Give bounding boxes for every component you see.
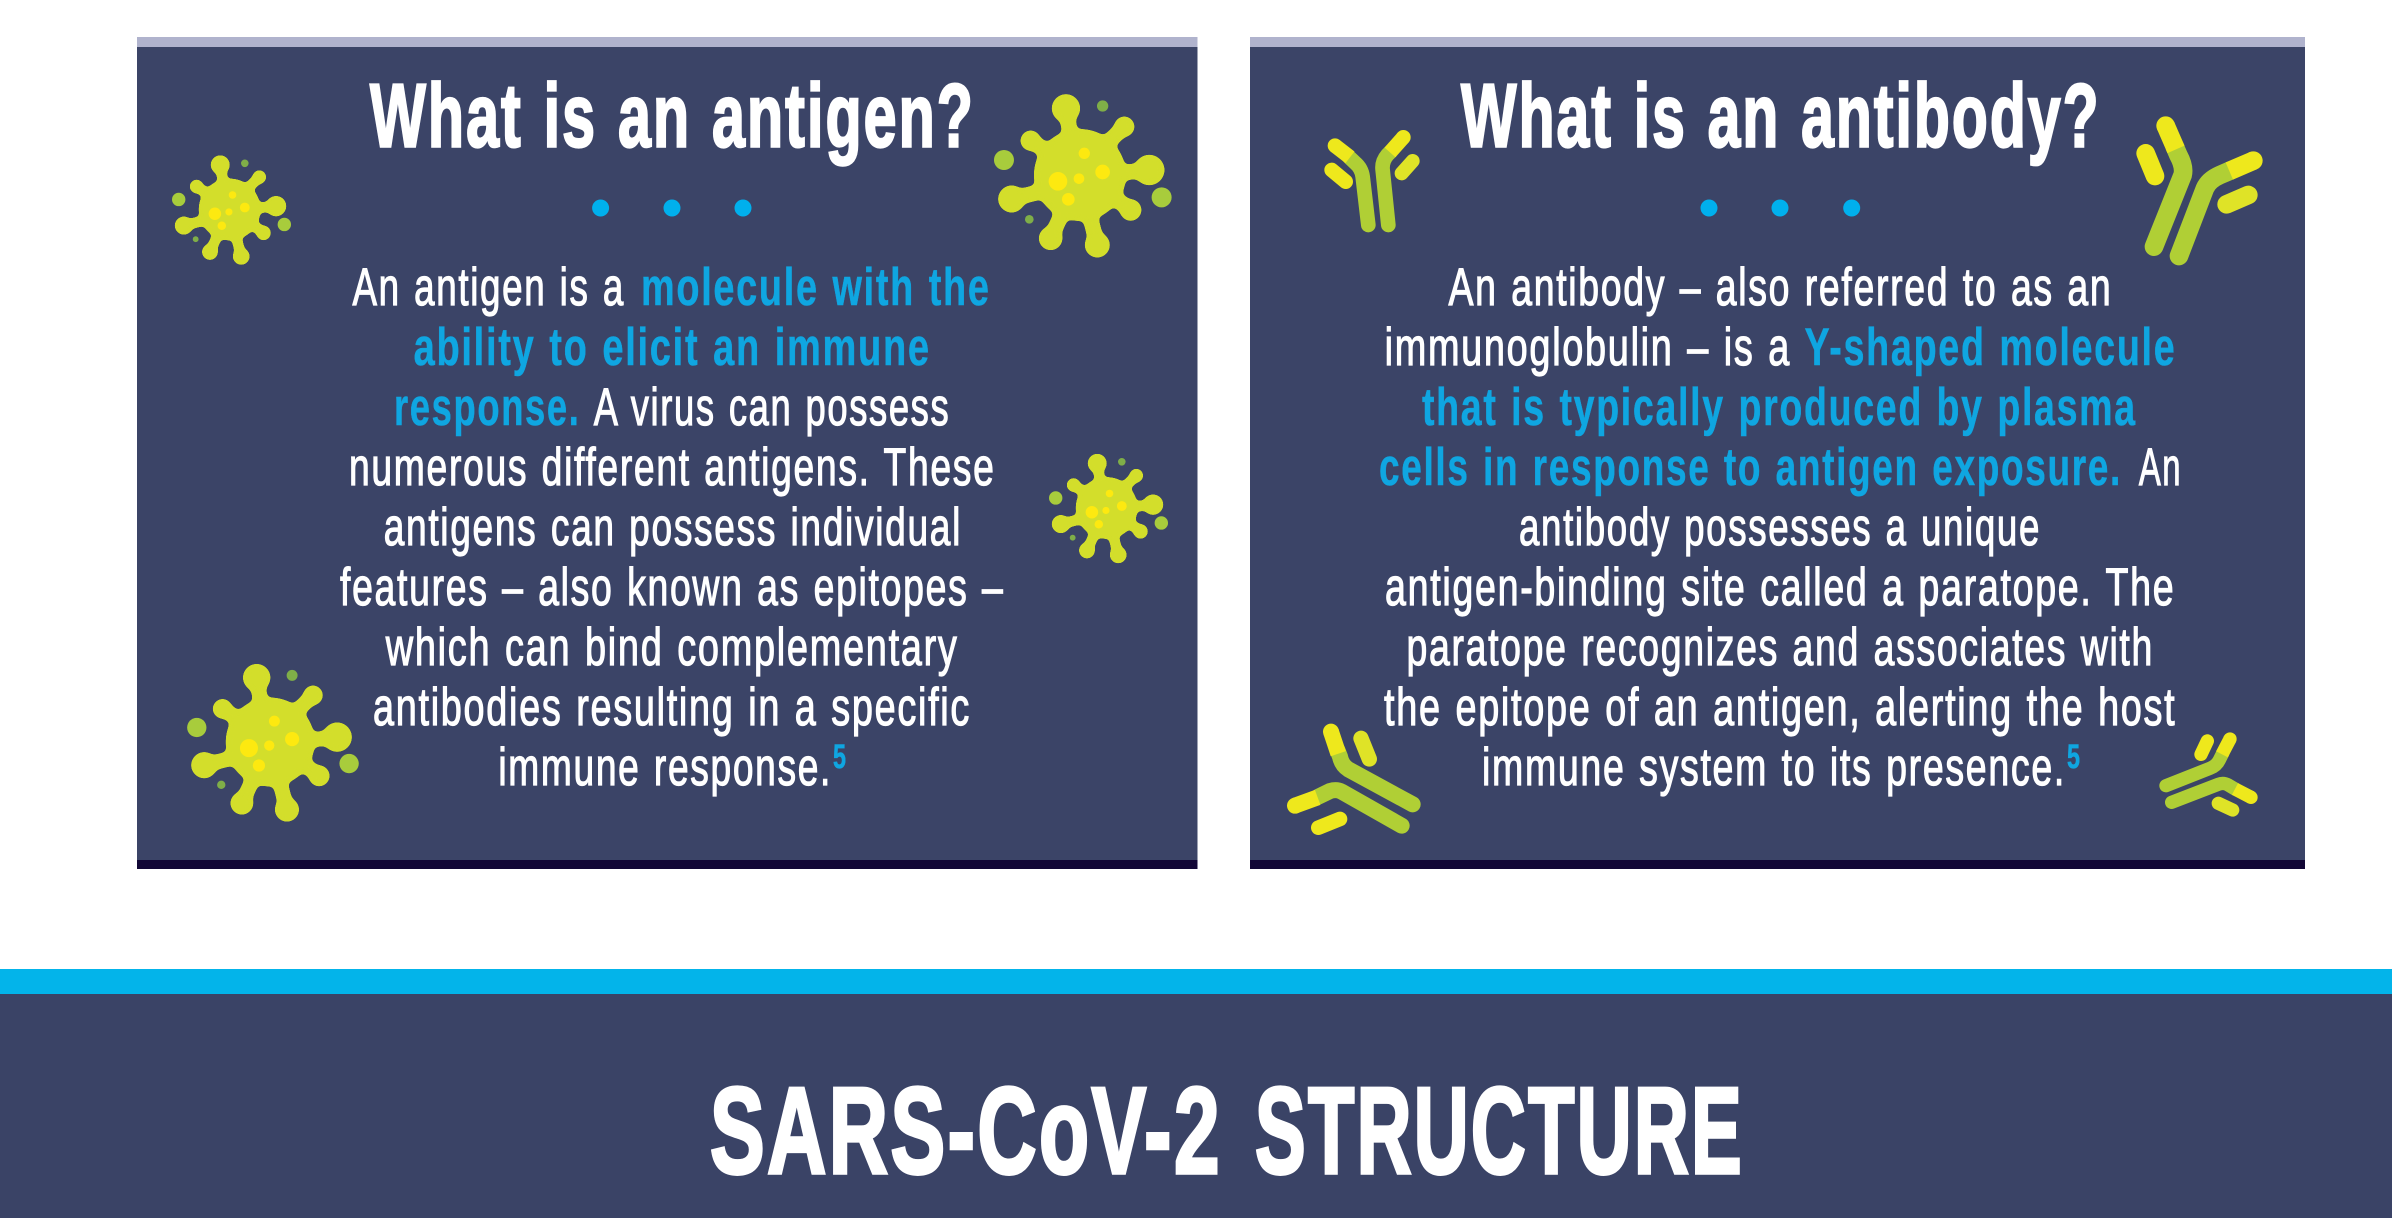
banner accent stripe [0,969,2392,994]
text block: antigen definition: ability to elicit an immune [414,318,931,377]
icon: antibody bottom right [2166,732,2258,810]
panel bottom band [1250,860,2305,869]
text block: antigen definition: molecule with the [641,258,991,317]
icon: antibody top right [2146,116,2263,256]
text block: antibody definition: antibody possesses a unique [1519,498,2041,557]
icon: antibody bottom left [1287,724,1413,828]
panel background [1250,37,2305,869]
icon: antibody top left [1328,130,1413,225]
section banner: SARS-CoV-2 structure [0,969,2392,1218]
text block: antibody definition: immune system to its presence. [1482,738,2066,797]
text block: antigen definition: An antigen is a [352,258,625,317]
panel: what is an antigen [137,37,1198,869]
text block: antibody definition: 5 [2067,738,2080,776]
icon: virus middle right [1049,454,1168,563]
text block: antigen definition: antigens can possess individual [384,498,962,557]
text block: antigen definition: response. [394,378,580,437]
icon: virus bottom left [187,664,359,822]
text block: antigen definition: immune response. [498,738,832,797]
icon: virus upper left [172,155,291,265]
text block: antigen definition: A virus can possess [594,378,950,437]
text block: antigen definition: which can bind complementary [385,618,959,677]
text block: antigen definition [340,258,1004,797]
dots divider [592,200,752,216]
text block: antigen definition: 5 [833,738,846,776]
banner heading: STRUCTURE [1255,1063,1744,1200]
text block: antibody definition: An antibody – also referred to as an [1448,258,2112,317]
text block: antibody definition: An [2139,438,2182,497]
panel: what is an antibody [1250,37,2305,869]
banner background [0,994,2392,1218]
text block: antigen definition: antibodies resulting in a specific [373,678,971,737]
heading: what is an antigen: What is an antigen? [370,67,975,167]
panel bottom band [137,860,1198,869]
text block: antigen definition: features – also known as epitopes – [340,558,1004,617]
panel background [137,37,1198,869]
text block: antibody definition [1379,258,2182,797]
dots divider [1700,200,1860,216]
text block: antigen definition: numerous different antigens. These [349,438,996,497]
panel top band [1250,37,2305,47]
icon: virus top right [994,94,1172,257]
text block: antibody definition: Y-shaped molecule [1804,318,2176,377]
text block: antibody definition: immunoglobulin – is a [1385,318,1791,377]
banner heading: SARS-CoV-2 [710,1063,1222,1200]
panel top band [137,37,1198,47]
